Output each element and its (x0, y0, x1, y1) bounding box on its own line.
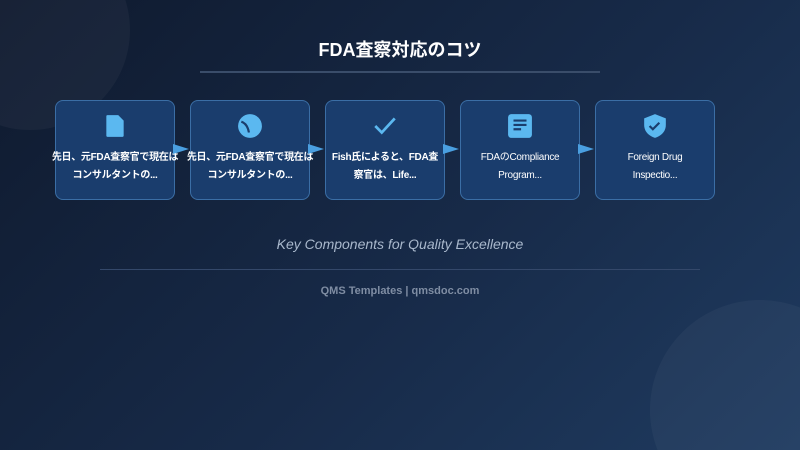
card 5: Foreign Drug (628, 152, 682, 163)
card 3: 察官は、Life... (354, 170, 416, 181)
card 1: 先日、元FDA査察官で現在は (52, 152, 178, 163)
icon: shield check (644, 114, 666, 138)
icon: list document (508, 114, 532, 138)
arrow 4 (578, 144, 594, 154)
subtitle: Key Components for Quality Excellence (277, 236, 523, 252)
card 4: Program... (498, 170, 542, 181)
card 4: FDAのCompliance (481, 152, 559, 163)
card 2: コンサルタントの... (207, 170, 293, 181)
card 3: Fish氏によると、FDA査 (332, 152, 438, 163)
icon: check (374, 118, 396, 134)
footer: QMS Templates | qmsdoc.com (321, 285, 479, 297)
arrow 3 (443, 144, 459, 154)
card 4 (460, 100, 580, 200)
icon: circle leaf (238, 114, 262, 138)
card 1 (55, 100, 175, 200)
title: FDA査察対応のコツ (318, 40, 482, 60)
card 1: コンサルタントの... (72, 170, 158, 181)
card 3 (325, 100, 445, 200)
arrow 2 (308, 144, 324, 154)
icon: document (106, 115, 124, 137)
card 5: Inspectio... (633, 170, 677, 181)
card 5 (595, 100, 715, 200)
arrow 1 (173, 144, 189, 154)
card 2: 先日、元FDA査察官で現在は (187, 152, 313, 163)
card 2 (190, 100, 310, 200)
